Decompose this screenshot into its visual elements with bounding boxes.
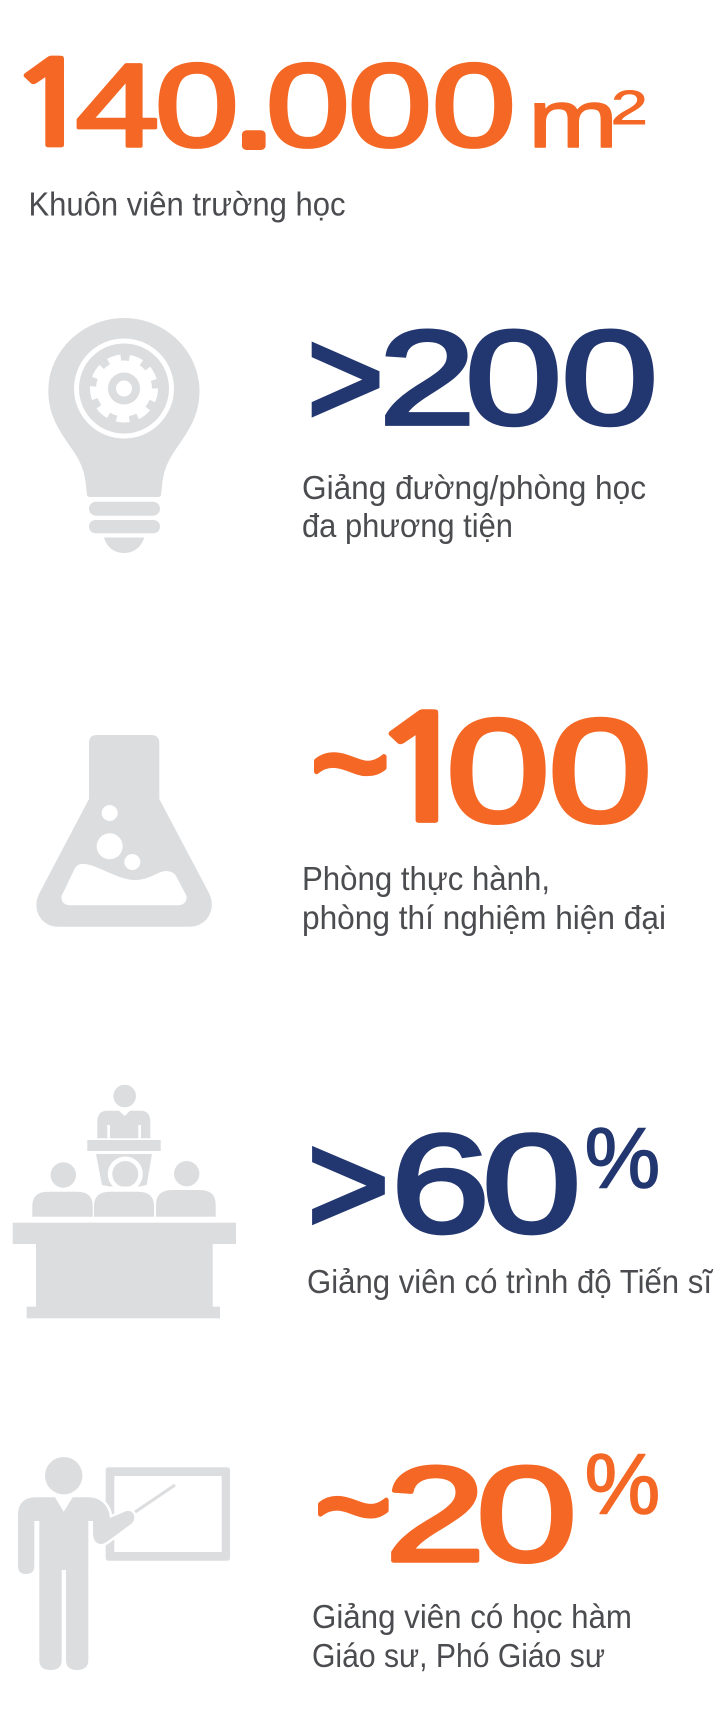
caption: laboratories: phòng thí nghiệm hiện đại xyxy=(302,899,666,936)
big number: more than 200: 200 xyxy=(379,302,658,452)
caption: professors: Giáo sư, Phó Giáo sư xyxy=(312,1637,605,1674)
big number: about 100: ~ xyxy=(310,680,390,846)
icon: light bulb with gear xyxy=(48,318,199,553)
icon: lecture audience xyxy=(13,1085,236,1318)
big number: about 20 percent: ~ xyxy=(314,1427,392,1583)
caption: laboratories: Phòng thực hành, xyxy=(302,860,550,897)
panel: doctorate lecturers xyxy=(13,1085,714,1318)
icon: teacher at board xyxy=(18,1457,230,1670)
big number: more than 60 percent: % xyxy=(585,1112,660,1206)
big number: more than 60 percent: 60 xyxy=(391,1105,581,1262)
panel: professors xyxy=(18,1427,660,1674)
big number: about 20 percent: % xyxy=(585,1438,660,1532)
panel: lecture halls xyxy=(48,302,658,553)
icon: flask xyxy=(36,735,212,927)
caption: lecture halls: đa phương tiện xyxy=(302,507,513,544)
panel: campus area xyxy=(6,39,647,222)
caption: professors xyxy=(312,1598,632,1674)
big number: 140.000 m2: m² xyxy=(528,74,647,165)
caption: professors: Giảng viên có học hàm xyxy=(312,1598,632,1635)
caption: laboratories xyxy=(302,860,666,936)
panel: laboratories xyxy=(36,680,666,936)
big number: 140.000 m2: 140.000 xyxy=(6,39,516,171)
caption: campus: Khuôn viên trường học xyxy=(28,186,346,222)
caption: lecture halls xyxy=(302,469,646,544)
big number: about 20 percent: 20 xyxy=(385,1438,577,1589)
caption: lecture halls: Giảng đường/phòng học xyxy=(302,469,646,506)
big number: more than 60 percent: > xyxy=(308,1104,389,1262)
caption: doctorate: Giảng viên có trình độ Tiến sĩ xyxy=(307,1263,714,1300)
big number: about 20 percent xyxy=(314,1427,660,1589)
big number: more than 60 percent xyxy=(308,1104,660,1262)
big number: about 100: 100 xyxy=(366,688,652,853)
big number: more than 200: > xyxy=(308,303,383,454)
